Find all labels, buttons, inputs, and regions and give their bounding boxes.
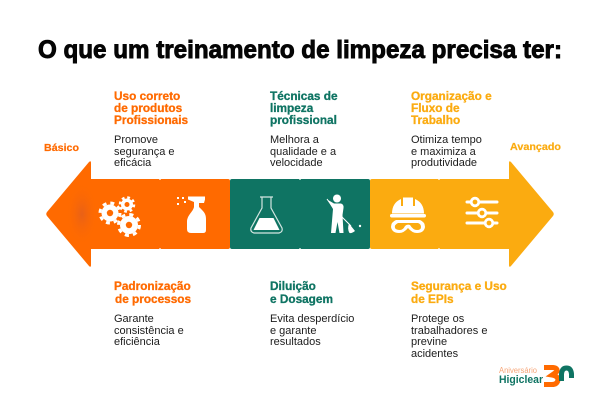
heading: limpeza [270,101,314,115]
heading: Trabalho [411,113,460,127]
body: trabalhadores e [411,325,487,337]
body: eficiência [114,336,161,348]
body: produtividade [411,157,477,169]
icon: spray bottle [177,196,206,233]
label: Básico: Básico [44,142,79,154]
body: Protege os [411,313,464,325]
text block: Padronização [114,279,191,348]
heading: de produtos [114,101,183,115]
arrow bar [46,161,554,267]
heading: e Dosagem [270,292,333,306]
logo: Aniversário Higiclear 30: Higiclear [499,374,544,386]
gear top [120,198,134,212]
green segment [230,179,370,249]
gear bottom [118,214,140,236]
text block: Diluição [270,279,354,348]
heading: Organização e [411,89,492,103]
body: segurança e [114,146,175,158]
body: e maximiza a [411,146,477,158]
heading: Uso correto [114,89,180,103]
body: velocidade [270,157,323,169]
body: Promove [114,134,158,146]
heading: Diluição [270,279,316,293]
icon: gears [100,198,140,236]
body: Garante [114,313,154,325]
body: e garante [270,325,316,337]
heading: Padronização [114,279,191,293]
text block: Uso correto [114,89,189,169]
icon: worker sweeping [327,194,361,233]
body: qualidade e a [270,146,337,158]
icon: sliders [467,198,497,227]
body: Otimiza tempo [411,134,482,146]
orange segment [90,179,230,249]
numeral 0 [562,368,572,381]
text block: Segurança [411,279,507,360]
shaded area near the head [66,182,98,246]
icon: flask [251,197,282,233]
heading: Profissionais [114,113,189,127]
logo: Aniversário Higiclear 30 [499,366,572,386]
yellow segment and right arrow head [370,161,554,267]
left arrow head [46,161,160,267]
gear left [100,203,120,223]
heading: Fluxo de [411,101,460,115]
heading: de processos [115,292,191,306]
body: eficácia [114,157,152,169]
segment notch lines [160,179,439,249]
icon: safety helmet and goggles [390,198,426,233]
logo text: Aniversário [499,366,538,375]
text block: Técnicas de limpeza [270,89,338,169]
heading: Técnicas de [270,89,338,103]
title: O que um treinamento de limpeza precisa ter: [38,36,562,64]
body: resultados [270,336,321,348]
text block: Organização [411,89,492,169]
body: consistência e [114,325,184,337]
heading: de EPIs [411,292,454,306]
body: previne [411,336,447,348]
label: Avançado: Avançado [510,141,561,153]
numeral 3 [544,368,558,385]
heading: Segurança e Uso [411,279,507,293]
body: Melhora a [270,134,319,146]
heading: profissional [270,113,337,127]
body: Evita desperdício [270,313,354,325]
body: acidentes [411,348,459,360]
